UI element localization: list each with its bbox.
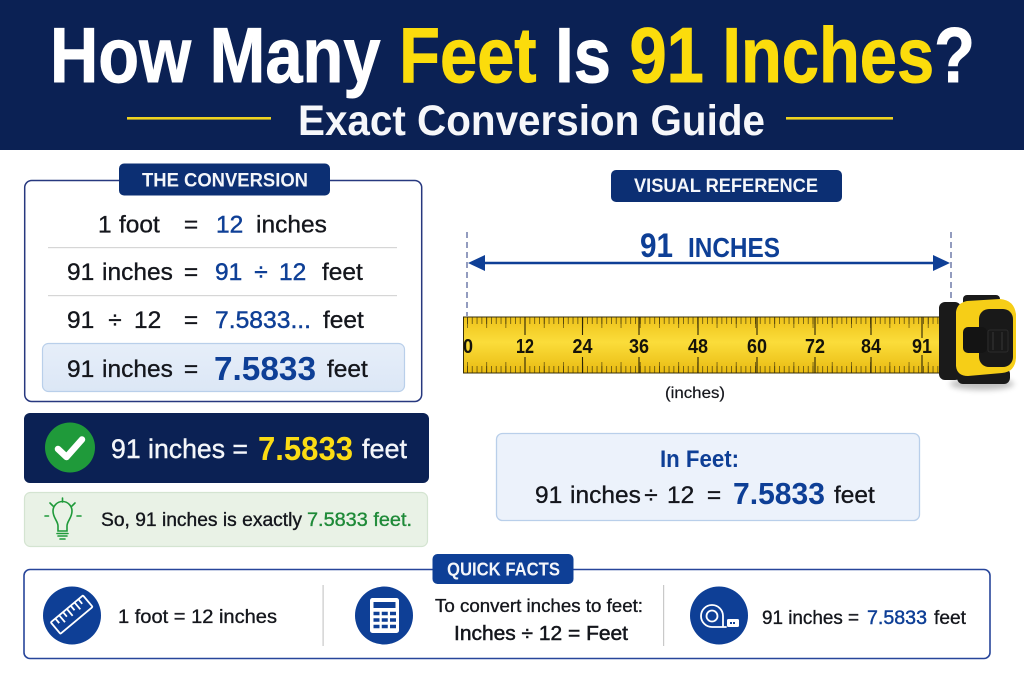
result banner [24, 413, 429, 483]
row: 1 foot = 12 inches: 1 [98, 212, 112, 238]
row: 1 foot = 12 inches: foot [119, 212, 160, 238]
tape numbers: 0 [463, 335, 473, 358]
title: How Many Feet Is 91 Inches? [50, 11, 975, 99]
callout: so, 91 inches: 7.5833 feet. [307, 510, 412, 531]
heading: visual reference: VISUAL REFERENCE [634, 176, 818, 197]
result banner: 7.5833 [258, 430, 353, 467]
measurement arrow: 91 inches: 91 [640, 227, 673, 265]
panel: in feet: inches [570, 482, 641, 509]
tape numbers [463, 335, 932, 358]
icon: tape measure [463, 295, 1016, 390]
icon: ruler [43, 586, 101, 644]
measurement arrow: 91 inches: INCHES [688, 232, 780, 263]
row: 1 foot = 12 inches [98, 212, 327, 238]
row: 91 inches = 91 / 12 feet: 12 [279, 259, 306, 286]
panel: in feet: = [707, 482, 721, 509]
fact: 91 inches = 7.5833 feet [690, 586, 967, 644]
panel: the conversion [25, 164, 422, 402]
panel: in feet [496, 434, 920, 520]
row: 91 inches = 91 / 12 feet: feet [322, 259, 363, 286]
icon: tape measure badge [690, 586, 748, 644]
fact: 91 inches = 7.5833 feet: feet [934, 607, 967, 629]
row: 1 foot = 12 inches: 12 [216, 212, 243, 238]
row: 91 inches = 91 / 12 feet [67, 259, 363, 286]
panel: quick facts [24, 554, 990, 658]
row: 91 / 12 = 7.5833... feet: = [184, 307, 198, 334]
row: 1 foot = 12 inches: inches [256, 212, 327, 238]
heading: the conversion [119, 164, 330, 196]
heading: quick facts: QUICK FACTS [447, 560, 560, 580]
fact: 91 inches = 7.5833 feet: 7.5833 [867, 607, 927, 629]
row: 91 inches = 91 / 12 feet: = [184, 259, 198, 286]
row: highlighted result [42, 344, 404, 392]
row: 91 / 12 = 7.5833... feet: 91 [67, 307, 94, 334]
row: 91 / 12 = 7.5833... feet: 7.5833... [215, 307, 311, 334]
fact: 91 inches = 7.5833 feet: 91 inches = [762, 607, 859, 629]
subtitle: Exact Conversion Guide [298, 97, 765, 145]
result banner: feet [362, 434, 407, 464]
callout: so, 91 inches [24, 492, 428, 546]
row: highlighted result: 7.5833 [214, 351, 316, 388]
tape numbers: 72 [805, 335, 825, 358]
row: 91 / 12 = 7.5833... feet [67, 307, 364, 334]
row: 91 inches = 91 / 12 feet: inches [102, 259, 173, 286]
fact: 1 foot = 12 inches [43, 586, 277, 644]
panel: in feet: 91 [535, 482, 562, 509]
panel: in feet: 12 [667, 482, 694, 509]
row: 91 / 12 = 7.5833... feet: feet [323, 307, 364, 334]
caption: inches: (inches) [665, 385, 725, 402]
fact: 1 foot = 12 inches: 1 foot = 12 inches [118, 606, 277, 628]
icon: light bulb [45, 498, 81, 539]
heading: visual reference [611, 170, 842, 202]
tape numbers: 91 [912, 335, 932, 358]
fact: how to convert [355, 586, 643, 645]
tape numbers: 84 [861, 335, 882, 358]
row: 91 inches = 91 / 12 feet: 91 [67, 259, 94, 286]
icon: green check [45, 422, 95, 472]
tape numbers: 12 [516, 335, 534, 358]
heading: the conversion: THE CONVERSION [142, 170, 308, 192]
icon: calculator [355, 586, 413, 644]
heading: quick facts [432, 554, 574, 584]
row: highlighted result: = [184, 356, 198, 383]
tape numbers: 48 [688, 335, 708, 358]
panel: in feet: 7.5833 [733, 476, 825, 511]
fact: how to convert: Inches ÷ 12 = Feet [454, 623, 628, 645]
row: 91 / 12 = 7.5833... feet: 12 [134, 307, 161, 334]
panel: in feet: feet [834, 482, 875, 509]
row: 91 inches = 91 / 12 feet: 91 [215, 259, 242, 286]
tape numbers: 24 [572, 335, 593, 358]
row: 91 / 12 = 7.5833... feet: ÷ [108, 307, 122, 334]
tape numbers: 36 [629, 335, 649, 358]
row: 91 inches = 91 / 12 feet: ÷ [254, 259, 268, 286]
tape blade [463, 317, 946, 373]
header banner [0, 0, 1024, 150]
fact: how to convert: To convert inches to feet: [435, 595, 643, 616]
callout: so, 91 inches: So, 91 inches is exactly [101, 510, 303, 531]
row: highlighted result: inches [102, 356, 173, 383]
row: highlighted result: 91 [67, 356, 94, 383]
tape case [939, 295, 1016, 384]
result banner: 91 inches = [111, 434, 248, 464]
panel: in feet: ÷ [644, 482, 658, 509]
tape numbers: 60 [747, 335, 767, 358]
panel: in feet: In Feet: [660, 446, 739, 473]
measurement arrow: 91 inches [467, 227, 951, 316]
row: highlighted result: feet [327, 356, 368, 383]
row: 1 foot = 12 inches: = [184, 212, 198, 238]
